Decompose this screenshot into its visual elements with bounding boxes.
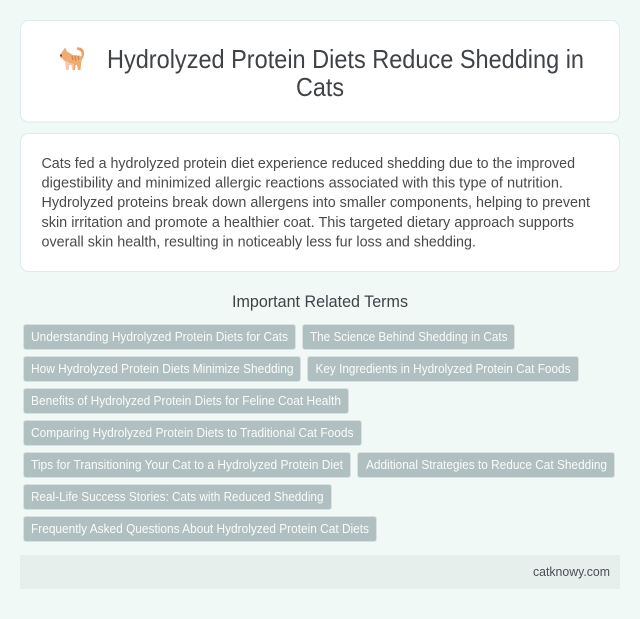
text block: summary paragraph: overall skin health, resulting in noticeably less fur loss and shedding. xyxy=(42,234,476,250)
panel: title card xyxy=(20,20,620,122)
tag xyxy=(24,484,332,510)
heading: title xyxy=(107,44,584,102)
text block: summary paragraph xyxy=(42,156,590,250)
tag: Key Ingredients in Hydrolyzed Protein Cat Foods xyxy=(316,361,570,376)
icon: orange cat xyxy=(60,47,84,70)
tag xyxy=(358,452,614,478)
tag: Frequently Asked Questions About Hydrolyzed Protein Cat Diets xyxy=(31,521,369,536)
tag xyxy=(24,356,300,382)
tag xyxy=(24,324,296,350)
text block: summary paragraph: Hydrolyzed proteins break down allergens into smaller components, helping to prevent xyxy=(42,195,590,211)
tag: Benefits of Hydrolyzed Protein Diets for Feline Coat Health xyxy=(31,393,341,408)
footer xyxy=(20,555,620,589)
panel: summary card xyxy=(20,134,620,272)
heading: important related terms: Important Related Terms xyxy=(232,292,408,311)
tag xyxy=(24,516,376,542)
text block: summary paragraph: digestibility and minimized allergic reactions associated with this type of nutrition. xyxy=(42,176,563,192)
heading: title: Cats xyxy=(296,72,344,102)
tag: How Hydrolyzed Protein Diets Minimize Shedding xyxy=(31,361,294,376)
tag: Understanding Hydrolyzed Protein Diets for Cats xyxy=(31,329,288,344)
tag xyxy=(308,356,578,382)
text block: summary paragraph: Cats fed a hydrolyzed protein diet experience reduced shedding due to the improved xyxy=(42,156,575,172)
footer: catknowy.com xyxy=(533,564,610,579)
tag: Additional Strategies to Reduce Cat Shedding xyxy=(366,457,607,472)
tag xyxy=(24,388,348,414)
heading: title: Hydrolyzed Protein Diets Reduce Shedding in xyxy=(107,44,584,74)
tag xyxy=(302,324,514,350)
panel: related term tags xyxy=(24,324,614,542)
tag: Real-Life Success Stories: Cats with Reduced Shedding xyxy=(31,489,324,504)
tag: The Science Behind Shedding in Cats xyxy=(310,329,508,344)
tag: Tips for Transitioning Your Cat to a Hydrolyzed Protein Diet xyxy=(31,457,343,472)
tag xyxy=(24,420,362,446)
tag xyxy=(24,452,350,478)
tag: Comparing Hydrolyzed Protein Diets to Traditional Cat Foods xyxy=(31,425,354,440)
text block: summary paragraph: skin irritation and promote a healthier coat. This targeted dietary approach supports xyxy=(42,215,574,231)
